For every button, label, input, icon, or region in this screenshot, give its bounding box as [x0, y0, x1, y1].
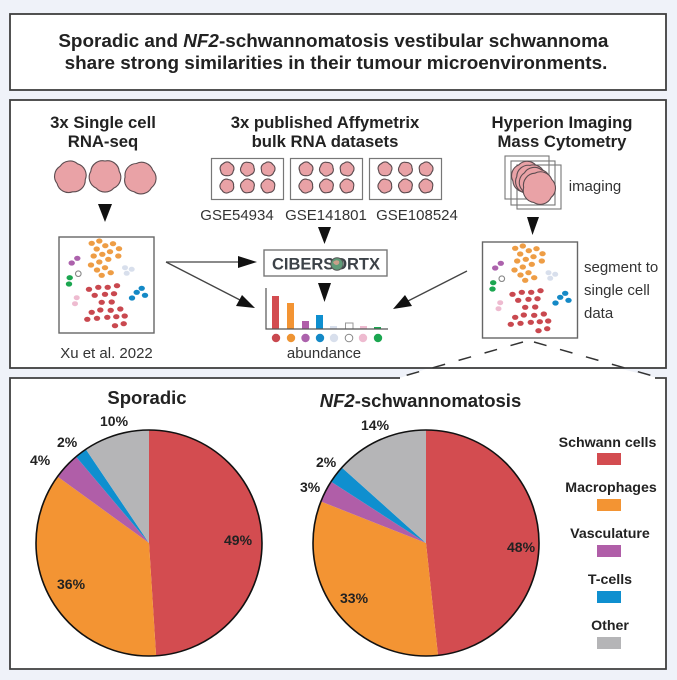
pie labels: NF2-schwannomatosis: 48% — [507, 539, 536, 555]
arrow: imaging scatter to chart — [393, 271, 467, 309]
pie labels: NF2-schwannomatosis: 2% — [316, 454, 337, 470]
dataset labels: GSE54934 — [200, 207, 274, 224]
icon: stacked imaging slides — [505, 156, 561, 209]
citation: Xu et al. 2022 — [60, 345, 153, 362]
pie labels: Sporadic: 36% — [57, 576, 86, 592]
arrow: datasets to CIBERSORTx — [318, 227, 331, 244]
dataset labels — [200, 207, 458, 224]
heading: single cell RNA-seq: RNA-seq — [68, 132, 138, 151]
label: segment to single cell data: segment to — [584, 259, 658, 276]
legend — [559, 435, 657, 649]
heading: imaging mass cytometry: Hyperion Imaging — [492, 113, 632, 132]
CIBERSORTx logo box — [264, 250, 387, 276]
heading: imaging mass cytometry: Mass Cytometry — [498, 132, 627, 151]
arrow: scatter to abundance chart — [166, 262, 255, 308]
label: imaging: imaging — [569, 178, 621, 195]
arrow: scatter to CIBERSORTx — [166, 256, 257, 268]
panel: cell abundance pie charts — [10, 369, 666, 669]
legend: Schwann cells — [559, 435, 656, 451]
dataset plate: GSE141801 — [290, 158, 362, 200]
bar chart: cell type abundance — [266, 288, 388, 342]
panel: methods workflow — [10, 100, 666, 368]
pie labels: Sporadic: 49% — [224, 532, 253, 548]
arrow: imaging to segmented scatter — [527, 217, 539, 235]
legend: Other — [591, 618, 629, 634]
legend: Macrophages — [565, 480, 657, 496]
CIBERSORTx logo box: CIBERSORTX — [272, 256, 380, 274]
heading: bulk RNA datasets: bulk RNA datasets — [252, 132, 398, 151]
dashed zoom lines from scatter to pie panel — [397, 342, 660, 378]
legend: Vasculature — [570, 526, 650, 542]
pie chart: Sporadic — [36, 430, 262, 656]
label: segment to single cell data: single cell — [584, 282, 650, 299]
dataset plate: GSE108524 — [370, 158, 442, 200]
pie labels: Sporadic: 4% — [30, 452, 51, 468]
title text: share strong similarities in their tumour microenvironments. — [65, 53, 607, 74]
title panel — [10, 14, 666, 90]
dataset labels: GSE141801 — [285, 207, 367, 224]
pie labels: Sporadic: 2% — [57, 434, 78, 450]
heading: bulk RNA datasets: 3x published Affymetrix — [231, 113, 419, 132]
heading: NF2-schwannomatosis: NF2-schwannomatosis — [320, 390, 521, 411]
pie labels: NF2-schwannomatosis — [300, 417, 536, 606]
heading: single cell RNA-seq: 3x Single cell — [50, 113, 156, 132]
dataset plate: GSE54934 — [212, 158, 284, 200]
pie labels: Sporadic — [30, 413, 253, 592]
label: segment to single cell data: data — [584, 305, 614, 322]
scatter plot: segmented cells — [482, 242, 578, 338]
arrow: samples to scatter — [98, 204, 112, 222]
heading: Sporadic: Sporadic — [107, 387, 187, 408]
pie labels: NF2-schwannomatosis: 14% — [361, 417, 390, 433]
pie chart: NF2-schwannomatosis — [313, 430, 539, 656]
pie labels: Sporadic: 10% — [100, 413, 129, 429]
arrow: CIBERSORTx to chart — [318, 283, 331, 302]
icon: three tumour samples — [52, 156, 162, 200]
pie labels: NF2-schwannomatosis: 33% — [340, 590, 369, 606]
chart label: abundance — [287, 345, 361, 362]
legend: T-cells — [588, 572, 632, 588]
scatter plot: single cell clusters — [59, 237, 154, 333]
pie labels: NF2-schwannomatosis: 3% — [300, 479, 321, 495]
dataset labels: GSE108524 — [376, 207, 458, 224]
title text: Sporadic and NF2-schwannomatosis vestibular schwannoma — [58, 31, 608, 52]
